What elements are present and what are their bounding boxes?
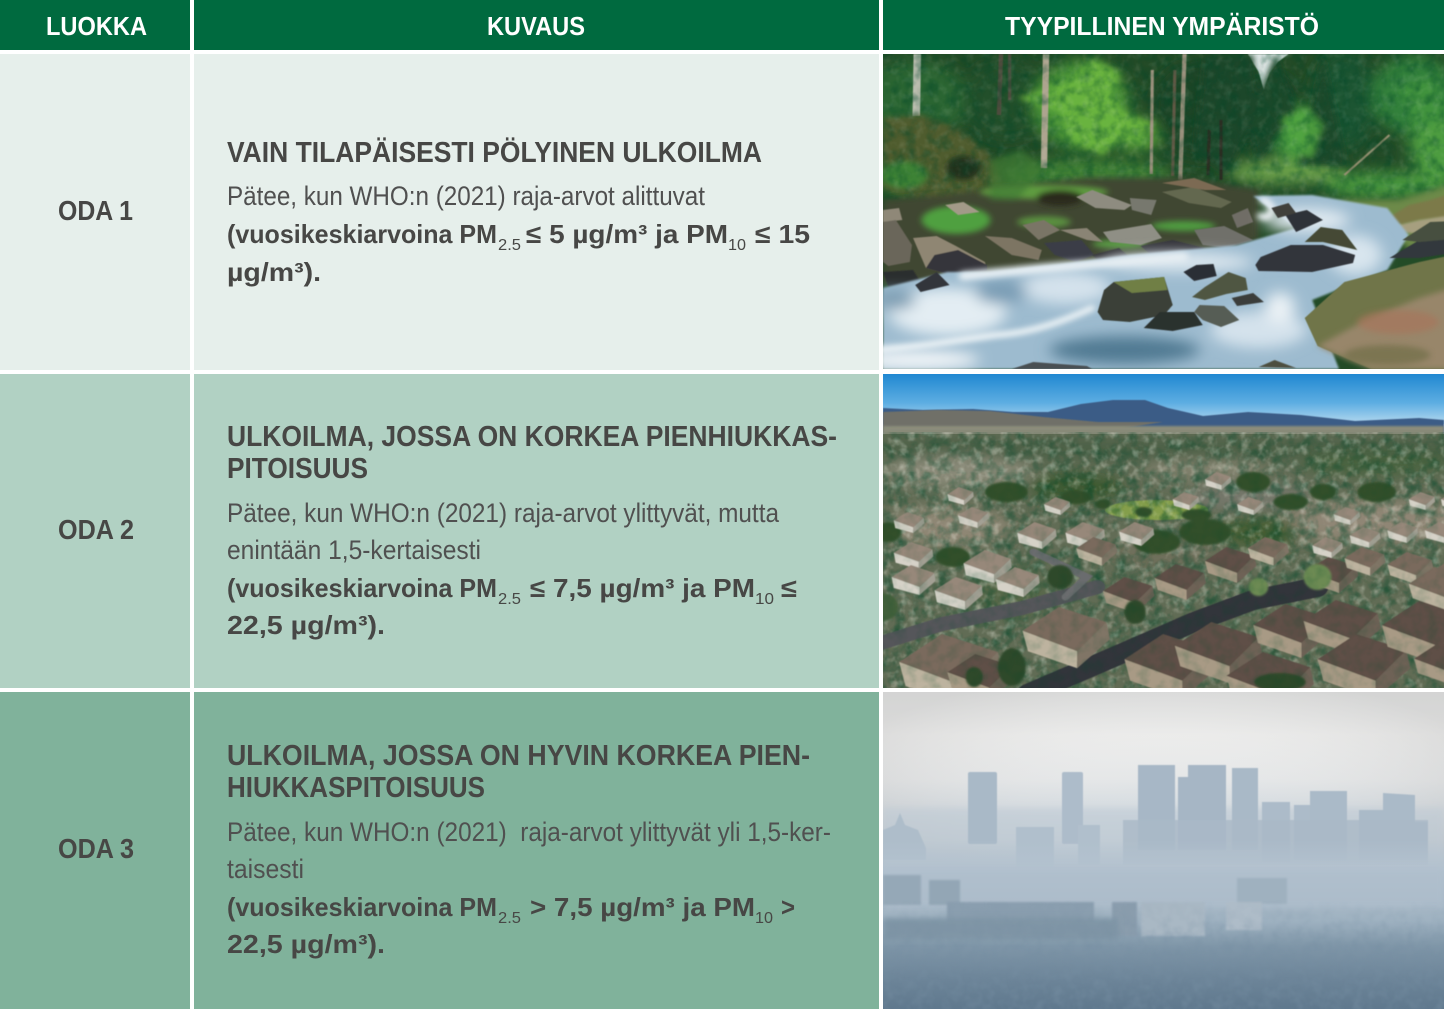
text: ODA 3 description (227, 817, 831, 884)
description cell: ODA 3 (194, 692, 879, 1009)
class cell: ODA 2 (0, 374, 190, 688)
text: ODA 2 description: Pätee, kun WHO:n (2021) raja-arvot ylittyvät, mutta (227, 498, 780, 528)
heading: ODA 2: ULKOILMA, JOSSA ON KORKEA PIENHIUKKAS- (227, 421, 837, 453)
class cell: ODA 3 (0, 692, 190, 1009)
text: ODA 1 limits: ≤ 15 (755, 219, 810, 249)
text: ODA 1 limits: 2.5 (498, 237, 521, 254)
text: ODA 2 limits: 10 (755, 591, 774, 608)
text: ODA 2 description (227, 498, 780, 565)
text: ODA 2 limits: ≤ 7,5 µg/m³ ja PM (530, 573, 755, 603)
text: ODA 3 limits: (vuosikeskiarvoina PM (227, 892, 497, 922)
right bank (1337, 184, 1444, 249)
description cell: ODA 2 (194, 374, 879, 688)
heading: ODA 2 (227, 421, 837, 485)
class cell: ODA 2: ODA 2 (58, 514, 134, 545)
heading: ODA 3 (227, 740, 810, 804)
text: ODA 1 limits: 10 (728, 237, 746, 254)
header: kuvaus: KUVAUS (487, 11, 585, 41)
water (883, 195, 1409, 369)
houses (891, 472, 1444, 688)
header: kuvaus (194, 0, 879, 50)
text: ODA 3 limits: > (781, 892, 795, 922)
text: ODA 2 limits: 2.5 (498, 591, 521, 608)
text: ODA 2 limits: 22,5 µg/m³). (227, 610, 385, 640)
photo: forest stream (851, 50, 1444, 370)
header: tyypillinen ympäristö: TYYPILLINEN YMPÄRISTÖ (1005, 11, 1319, 41)
road network (878, 552, 1318, 694)
park (1105, 500, 1208, 520)
conifers and canopy (1017, 54, 1444, 175)
text: ODA 3 description: Pätee, kun WHO:n (2021) raja-arvot ylittyvät yli 1,5-ker- (227, 817, 831, 847)
mid-distance blocks (883, 875, 1287, 936)
boulder (1305, 248, 1444, 369)
text: ODA 1 limits: (vuosikeskiarvoina PM (227, 219, 497, 249)
class cell: ODA 1 (0, 54, 190, 370)
text: ODA 1 limits: ≤ 5 µg/m³ ja PM (526, 219, 728, 249)
text: ODA 2 limits: (vuosikeskiarvoina PM (227, 573, 497, 603)
heading: ODA 3: ULKOILMA, JOSSA ON HYVIN KORKEA PIEN- (227, 740, 810, 772)
text: ODA 1 limits: µg/m³). (227, 257, 321, 287)
text: ODA 3 limits: 10 (755, 910, 773, 927)
photo: smoggy city skyline (883, 690, 1444, 1009)
text: ODA 3 limits: 22,5 µg/m³). (227, 929, 385, 959)
description cell: ODA 1 (194, 54, 879, 370)
row: ODA 3 (0, 690, 1444, 1009)
text: ODA 2 description: enintään 1,5-kertaisesti (227, 535, 481, 565)
heading: ODA 1: VAIN TILAPÄISESTI PÖLYINEN ULKOILMA (227, 136, 762, 169)
heading: ODA 3: HIUKKASPITOISUUS (227, 772, 485, 804)
class cell: ODA 1: ODA 1 (58, 195, 133, 226)
text: ODA 2 limits: ≤ (781, 573, 797, 603)
text: ODA 3 limits: > 7,5 µg/m³ ja PM (530, 892, 755, 922)
text: ODA 1 description: Pätee, kun WHO:n (2021) raja-arvot alittuvat (227, 181, 705, 211)
rock bank (883, 178, 1259, 285)
class cell: ODA 3: ODA 3 (58, 833, 134, 864)
row: ODA 1 (0, 50, 1444, 370)
hillside (883, 111, 1000, 198)
table header (0, 0, 1444, 50)
sky gap (1248, 54, 1289, 90)
header: luokka: LUOKKA (46, 11, 147, 41)
header: tyypillinen ympäristö (883, 0, 1444, 50)
row: ODA 2 (0, 372, 1444, 713)
text: ODA 3 limits: 2.5 (498, 910, 521, 927)
skyline towers (883, 765, 1428, 867)
text: ODA 1 limits (227, 219, 810, 287)
stones in stream (915, 203, 1444, 369)
text: ODA 3 limits (227, 892, 795, 959)
text: ODA 3 description: taisesti (227, 854, 304, 884)
photo: suburb (883, 374, 1444, 688)
water swaths (851, 208, 1382, 370)
text: ODA 2 limits (227, 573, 797, 640)
header: luokka (0, 0, 190, 50)
heading: ODA 2: PITOISUUS (227, 453, 368, 485)
